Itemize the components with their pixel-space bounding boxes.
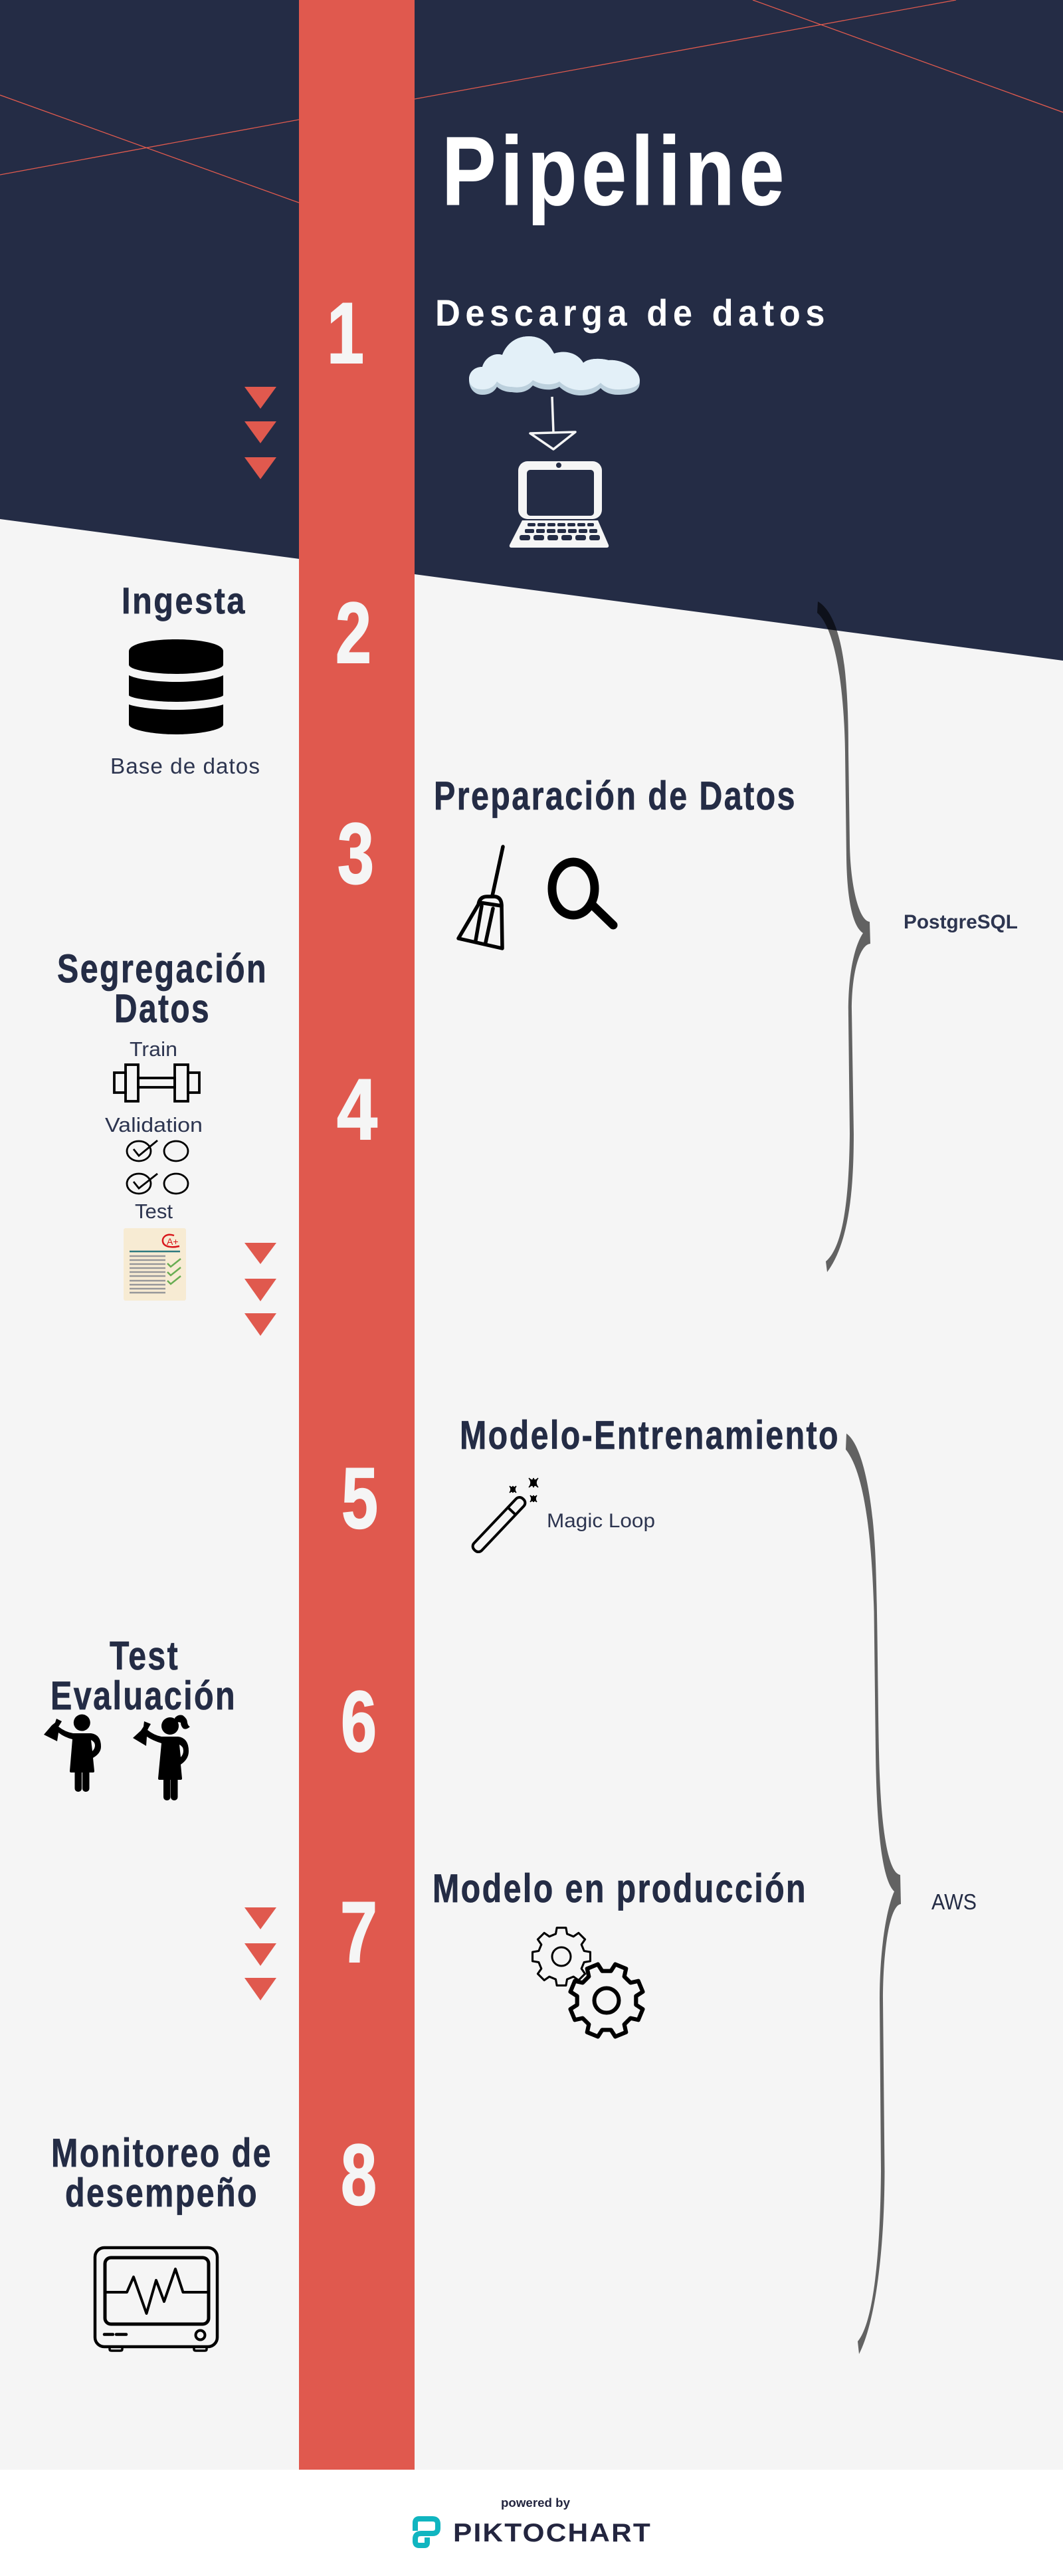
line 2: desempeño [65,2171,258,2215]
panel: dark header [0,0,1063,661]
icon: magic wand [471,1478,538,1554]
heading: Test Evaluacion [50,1634,237,1718]
title: Pipeline [442,117,789,226]
icon: magnifier [552,862,613,925]
icon: cloud [469,336,640,395]
number 1: 1 [327,284,364,381]
icon: broom [458,847,503,948]
panel: vertical timeline bar [299,0,415,2470]
icon: girl with flask [133,1715,190,1800]
text: Magic Loop: Magic Loop [547,1510,655,1532]
text: Test label: Test [135,1200,173,1223]
heading: Preparacion de Datos: Preparación de Datos [434,774,797,818]
icon: database [129,639,223,734]
line 2: Datos [114,986,211,1031]
text: powered by: powered by [501,2496,570,2510]
heading: Ingesta: Ingesta [122,580,246,621]
icon: download arrow [530,397,575,449]
icon: Piktochart logo [415,2519,438,2545]
heading: Modelo en produccion: Modelo en producción [433,1866,807,1911]
number 3: 3 [338,805,374,902]
number 7: 7 [340,1883,377,1981]
line 1: Test [110,1634,179,1678]
icon: graded test sheet [124,1228,186,1301]
brace: PostgreSQL [817,601,870,1272]
icon: checked circles row 2 [127,1174,188,1194]
heading: Monitoreo de desempeno [51,2131,272,2215]
arrows: triangles group 1 [244,387,276,479]
step numbers [327,284,378,2223]
label: AWS: AWS [931,1889,977,1914]
text: Train: Train [130,1037,177,1061]
number 8: 8 [341,2126,377,2223]
text: Validation: Validation [105,1113,203,1136]
icon: dumbbell [114,1065,199,1101]
heading: Descarga de datos: Descarga de datos [435,292,830,334]
icon: laptop [510,461,609,548]
icon: checked circles row 1 [127,1140,188,1161]
arrows: triangles group 3 [244,1907,276,2000]
number 5: 5 [341,1449,378,1547]
footer: powered by Piktochart [415,2496,652,2547]
line 1: Monitoreo de [51,2131,272,2175]
icon: person with flask [44,1715,101,1792]
arrows: triangles group 2 [244,1243,276,1336]
icon: graded test sheet: A+ [167,1236,179,1247]
label: PostgreSQL: PostgreSQL [904,911,1018,933]
icon: heart monitor [95,2248,217,2351]
number 4: 4 [337,1061,377,1158]
text: Base de datos: Base de datos [110,754,260,778]
icon: gears [533,1928,654,2048]
brace: AWS [846,1434,901,2354]
number 2: 2 [336,584,371,681]
heading: Segregacion Datos [57,946,268,1031]
number 6: 6 [341,1673,377,1770]
line 1: Segregación [57,946,268,991]
text: PIKTOCHART: PIKTOCHART [453,2519,652,2547]
heading: Modelo-Entrenamiento: Modelo-Entrenamiento [460,1413,840,1457]
line 2: Evaluación [50,1673,237,1718]
